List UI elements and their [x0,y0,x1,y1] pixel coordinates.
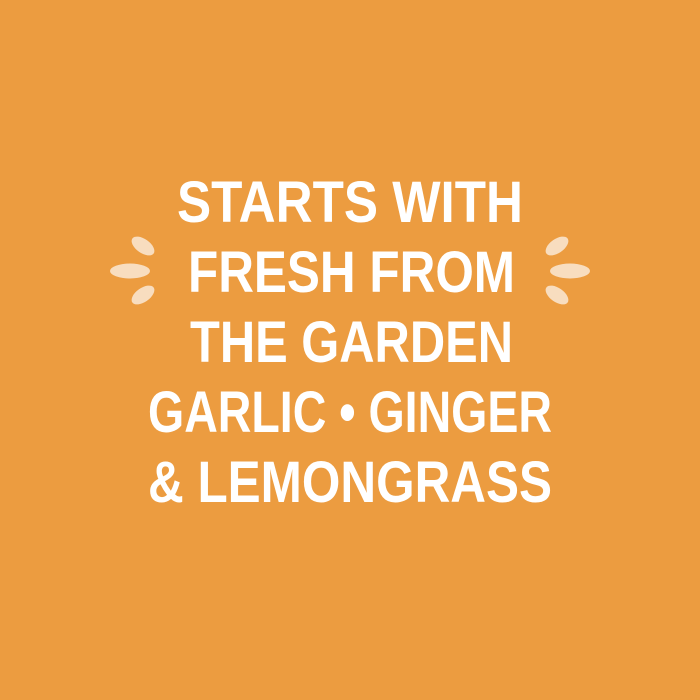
headline text [148,170,552,515]
icon: left burst [110,233,158,308]
line 3: THE GARDEN [190,310,513,375]
line 5: & LEMONGRASS [148,450,552,515]
line 2: FRESH FROM [188,240,515,305]
line 4: GARLIC • GINGER [148,380,552,445]
line 1: STARTS WITH [177,170,523,235]
icon: right burst [542,233,590,308]
